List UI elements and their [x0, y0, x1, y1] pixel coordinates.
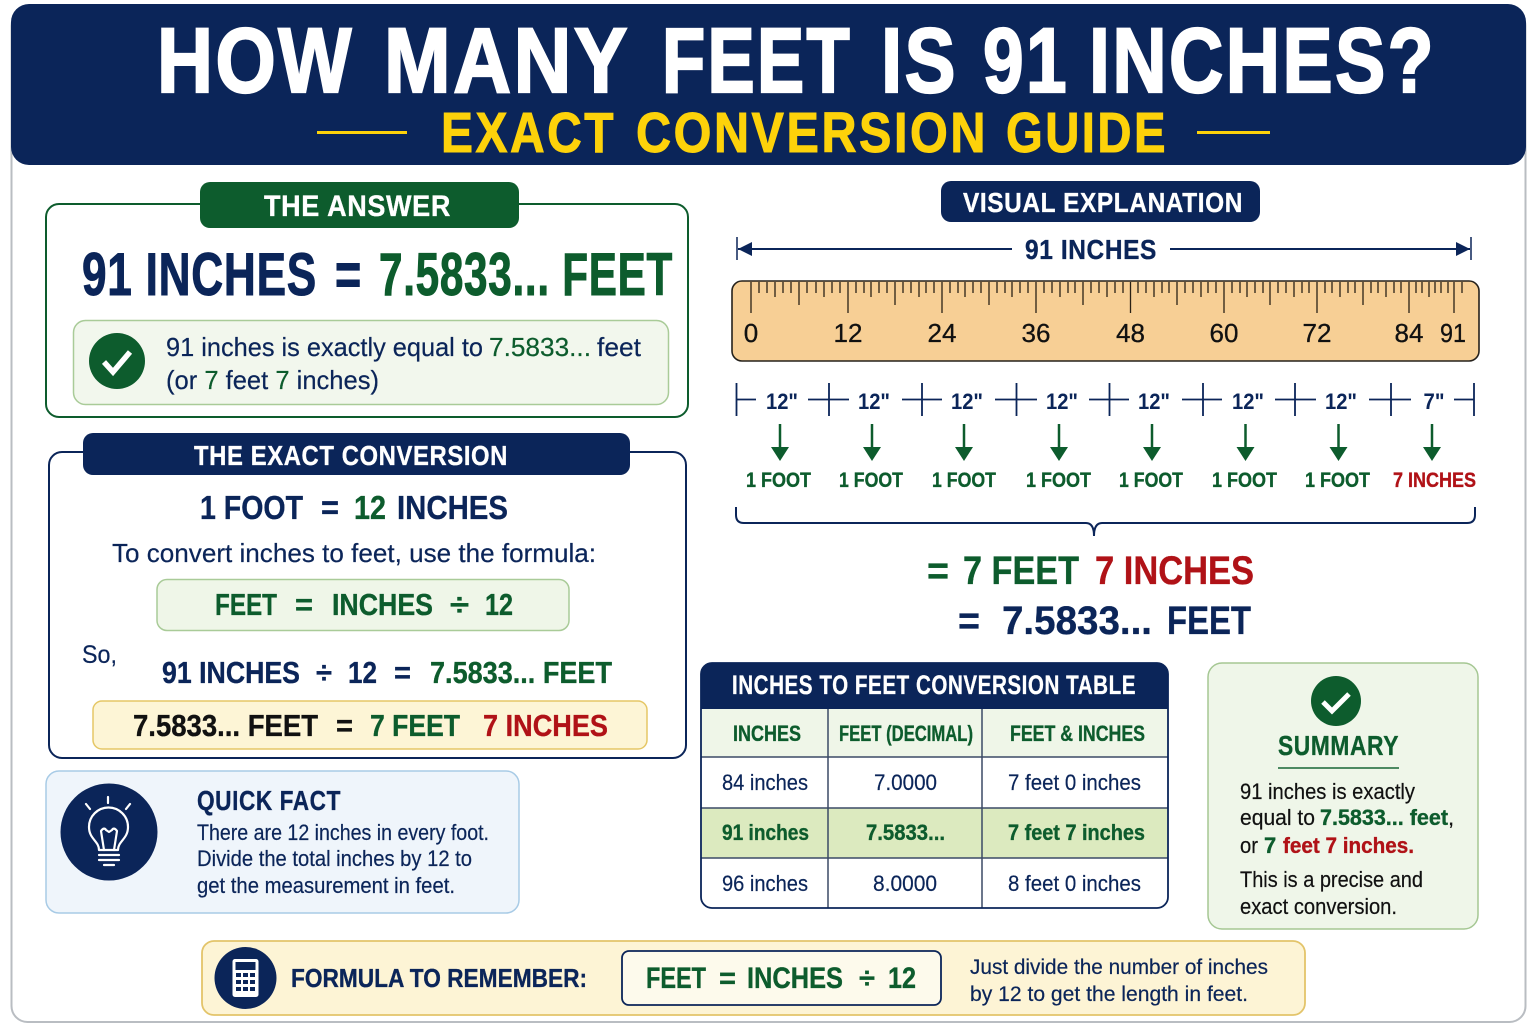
segment labels: 1 FOOT — [839, 469, 903, 492]
calculation line: 7.5833... FEET — [430, 655, 612, 690]
quick fact text: There are 12 inches in every foot. — [197, 820, 489, 845]
subtitle: EXACT — [441, 101, 616, 165]
quick fact heading: QUICK FACT — [197, 785, 341, 816]
table row: 84 inches: 7 feet 0 inches — [1008, 770, 1141, 795]
summary text: feet 7 inches. — [1283, 833, 1414, 858]
panel: the answer — [46, 182, 688, 417]
answer note box — [74, 320, 668, 404]
table row: 84 inches — [722, 770, 1141, 795]
formula callout — [622, 951, 941, 1005]
calculation line: ÷ — [316, 655, 332, 690]
ruler: 48 — [1116, 318, 1145, 348]
dimension arrow: 91 inches: 91 INCHES — [1025, 234, 1157, 265]
answer note text: 7.5833... — [489, 332, 591, 362]
title: INCHES? — [1089, 10, 1436, 112]
result box: = — [336, 708, 353, 743]
formula box: = — [295, 587, 313, 622]
summary heading — [1278, 730, 1399, 769]
table column heads — [733, 721, 1145, 746]
table row: 96 inches: 8 feet 0 inches — [1008, 871, 1141, 896]
summary text: 91 inches is exactly — [1240, 779, 1415, 804]
segment markers: 12" — [1232, 389, 1264, 414]
equation: one foot: = — [321, 489, 339, 526]
result box: 7.5833... FEET — [133, 708, 318, 743]
table title: INCHES TO FEET CONVERSION TABLE — [732, 670, 1136, 700]
formula callout: FEET — [646, 962, 706, 995]
icon: calculator — [214, 947, 276, 1009]
conversion table — [701, 663, 1168, 908]
segment labels — [746, 469, 1476, 492]
formula note: Just divide the number of inches — [970, 955, 1268, 979]
formula box: 12 — [485, 587, 513, 622]
calculation line: 12 — [348, 655, 377, 690]
heading: visual explanation — [941, 181, 1260, 222]
result equations: FEET — [1167, 599, 1251, 643]
table row: 84 inches: 84 inches — [722, 770, 808, 795]
segment labels: 1 FOOT — [1305, 469, 1370, 492]
formula label: FORMULA TO REMEMBER: — [291, 963, 587, 993]
segment markers: 12" — [951, 389, 983, 414]
summary text: 7 — [1264, 833, 1276, 858]
equation: one foot — [200, 489, 508, 526]
title — [157, 10, 1436, 112]
result box: 7 FEET — [370, 708, 460, 743]
summary text: , — [1448, 805, 1454, 830]
brace — [736, 507, 1475, 536]
table row: 96 inches: 8.0000 — [873, 871, 937, 896]
table row: 96 inches — [722, 871, 1141, 896]
result box — [93, 701, 647, 749]
heading: the answer — [200, 182, 519, 228]
ruler: 72 — [1303, 318, 1331, 348]
heading: the exact conversion — [83, 433, 630, 475]
subtitle: GUIDE — [1006, 101, 1168, 165]
calculation line: = — [394, 655, 411, 690]
ruler: 0 — [744, 318, 758, 348]
formula callout: INCHES — [747, 962, 843, 995]
formula intro: To convert inches to feet, use the formula: — [112, 538, 596, 568]
segment markers: 12" — [1046, 389, 1078, 414]
summary text: 7.5833... feet — [1320, 805, 1449, 830]
quick fact text — [197, 820, 489, 898]
formula box: FEET — [215, 587, 277, 622]
table row: 91 inches: 7 feet 7 inches — [1008, 820, 1145, 845]
panel: the exact conversion — [49, 433, 686, 758]
segment labels: 1 FOOT — [1026, 469, 1091, 492]
calculation line: 91 INCHES — [162, 655, 300, 690]
title: HOW — [157, 10, 354, 112]
icon: summary check — [1311, 676, 1361, 726]
answer equation: 91 INCHES — [82, 241, 317, 308]
answer equation: 7.5833... FEET — [379, 241, 673, 308]
so label: So, — [82, 641, 117, 669]
result equations: 7 INCHES — [1095, 549, 1254, 593]
result equations: = — [958, 599, 980, 643]
result box: 7 INCHES — [483, 708, 608, 743]
segment markers: 12" — [766, 389, 798, 414]
icon: light bulb — [60, 784, 158, 880]
formula box — [157, 580, 569, 630]
summary text — [1240, 779, 1454, 919]
answer note text: feet — [597, 332, 642, 362]
ruler — [732, 281, 1479, 361]
title: IS — [881, 10, 958, 112]
answer note text: 91 inches is exactly equal to — [166, 332, 483, 362]
heading: the exact conversion: THE EXACT CONVERSION — [194, 440, 508, 471]
equation: one foot: 12 — [354, 489, 386, 526]
panel: summary — [1208, 663, 1478, 929]
summary text: exact conversion. — [1240, 894, 1397, 919]
ruler: 84 — [1395, 318, 1423, 348]
ruler: 24 — [928, 318, 956, 348]
segment markers: 12" — [1325, 389, 1357, 414]
segment labels: 1 FOOT — [1119, 469, 1183, 492]
segment labels: 1 FOOT — [1212, 469, 1277, 492]
segment markers: 7" — [1424, 389, 1444, 414]
icon: check mark — [89, 333, 145, 389]
result equations: 7.5833... — [1002, 599, 1152, 643]
formula callout: = — [719, 962, 736, 995]
result equations — [927, 549, 1254, 643]
table column heads: FEET & INCHES — [1010, 721, 1145, 746]
panel: quick fact — [46, 771, 519, 913]
quick fact text: get the measurement in feet. — [197, 873, 455, 898]
summary heading: SUMMARY — [1278, 730, 1399, 761]
table row: 91 inches — [722, 820, 1145, 845]
ruler: 12 — [834, 318, 862, 348]
table row: 91 inches: 91 inches — [722, 820, 809, 845]
answer note text — [166, 332, 642, 395]
table column heads: INCHES — [733, 721, 801, 746]
answer equation: = — [335, 241, 362, 308]
result equations: 7 FEET — [963, 549, 1079, 593]
formula callout: 12 — [888, 962, 916, 995]
table row: 84 inches: 7.0000 — [874, 770, 937, 795]
formula box: ÷ — [450, 587, 469, 622]
summary text: This is a precise and — [1240, 867, 1423, 892]
segment markers: 12" — [1138, 389, 1170, 414]
segment markers — [736, 383, 1474, 416]
ruler: 91 — [1440, 318, 1466, 348]
subtitle: CONVERSION — [636, 101, 988, 165]
table column heads: FEET (DECIMAL) — [839, 721, 973, 746]
formula note: by 12 to get the length in feet. — [970, 982, 1248, 1006]
summary text: equal to — [1240, 805, 1315, 830]
title: FEET — [662, 10, 852, 112]
segment labels: 7 INCHES — [1393, 469, 1476, 492]
title: 91 — [983, 10, 1069, 112]
formula note — [970, 955, 1268, 1006]
header banner — [11, 4, 1526, 165]
table row: 96 inches: 96 inches — [722, 871, 808, 896]
heading: the answer: THE ANSWER — [264, 190, 451, 223]
title: MANY — [384, 10, 630, 112]
summary text: or — [1240, 833, 1258, 858]
ruler: 60 — [1210, 318, 1238, 348]
equation: one foot: 1 FOOT — [200, 489, 303, 526]
quick fact text: Divide the total inches by 12 to — [197, 846, 472, 871]
result equations: = — [927, 549, 949, 593]
calculation line — [162, 655, 612, 690]
arrows down — [771, 424, 1441, 461]
ruler: 36 — [1022, 318, 1050, 348]
formula to remember bar — [202, 941, 1305, 1015]
answer note text: (or 7 feet 7 inches) — [166, 365, 379, 395]
heading: visual explanation: VISUAL EXPLANATION — [963, 187, 1243, 218]
equation: one foot: INCHES — [397, 489, 508, 526]
subtitle — [317, 101, 1270, 165]
segment labels: 1 FOOT — [932, 469, 996, 492]
segment markers: 12" — [858, 389, 890, 414]
formula callout: ÷ — [859, 962, 875, 995]
table row: 91 inches: 7.5833... — [866, 820, 945, 845]
formula box: INCHES — [332, 587, 433, 622]
answer equation — [82, 241, 673, 308]
dimension arrow: 91 inches — [737, 234, 1471, 265]
segment labels: 1 FOOT — [746, 469, 811, 492]
